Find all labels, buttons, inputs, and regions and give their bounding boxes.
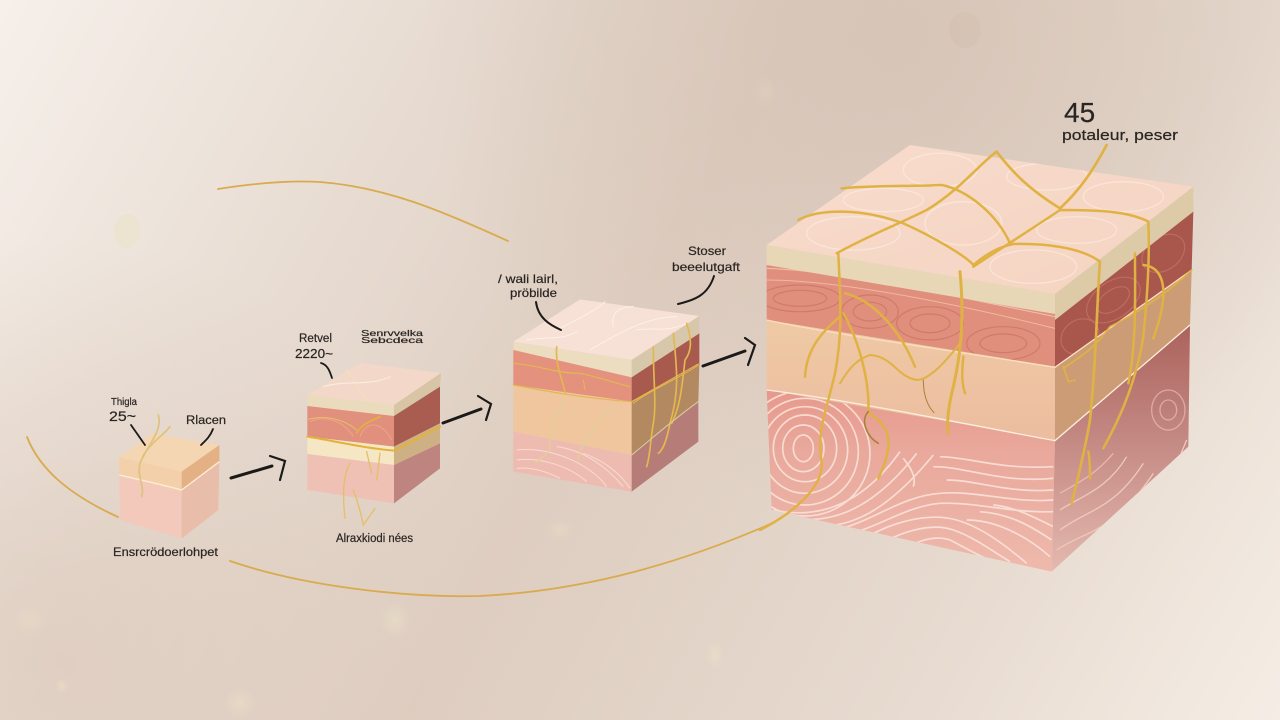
top-face cell outlines — [807, 153, 1163, 283]
arrow 2 — [443, 396, 491, 423]
label: big cube value — [1062, 97, 1178, 144]
label: cube 1 right: Rlacen — [186, 415, 226, 427]
tan band — [767, 320, 1055, 440]
label: cube 1 top: Thigla — [111, 397, 137, 408]
surface veins — [527, 302, 687, 350]
label: cube 3 left: / wali lairl, — [498, 272, 558, 286]
skin cube 2 — [307, 363, 441, 525]
label: cube 2 left — [295, 333, 333, 361]
label: big cube value: 45 — [1064, 97, 1095, 128]
layer seam lines — [767, 270, 1192, 441]
label: cube 2 top: Sebcdeca — [361, 335, 423, 345]
nerve network — [760, 145, 1192, 530]
connector curve: top arc — [218, 181, 508, 241]
fibrous pink lines — [517, 447, 630, 488]
cream band — [767, 245, 1055, 314]
big skin cube — [740, 145, 1193, 572]
connector curve: lower sweep to big cube — [230, 522, 775, 596]
nerve strands — [139, 415, 170, 497]
label: cube 1 caption: Ensrcrödoerlohpet — [113, 545, 219, 559]
label: cube 2 left: Retvel — [299, 333, 332, 345]
label: cube 2 left: 2220~ — [295, 346, 333, 361]
label: cube 2 top — [361, 328, 423, 345]
pink band swirl lines — [740, 391, 1053, 563]
label: cube 3 left: pröbilde — [510, 286, 557, 300]
connector curve: left arc — [27, 437, 118, 517]
label: cube 3 right: beeelutgaft — [672, 260, 741, 274]
nerve strands — [307, 370, 440, 525]
skin cube 3 — [513, 299, 699, 492]
label: cube 1 top — [109, 397, 137, 424]
label: cube 2 caption: Alraxkiodi nées — [336, 533, 413, 545]
pink band — [767, 390, 1055, 572]
nerve strands — [513, 323, 698, 467]
arrow 3 — [703, 338, 755, 366]
label: big cube value: potaleur, peser — [1062, 128, 1178, 144]
label: cube 3 left — [498, 272, 558, 300]
label: cube 1 top: 25~ — [109, 408, 136, 424]
leader lines — [131, 276, 714, 445]
red band — [767, 265, 1055, 367]
label: cube 2 top: Senrvvelka — [361, 328, 423, 338]
label: cube 3 right: Stoser — [688, 244, 726, 258]
skin cube 1 — [119, 415, 219, 538]
top face — [767, 145, 1193, 294]
arrow 1 — [231, 456, 285, 480]
label: cube 3 right — [672, 244, 741, 274]
